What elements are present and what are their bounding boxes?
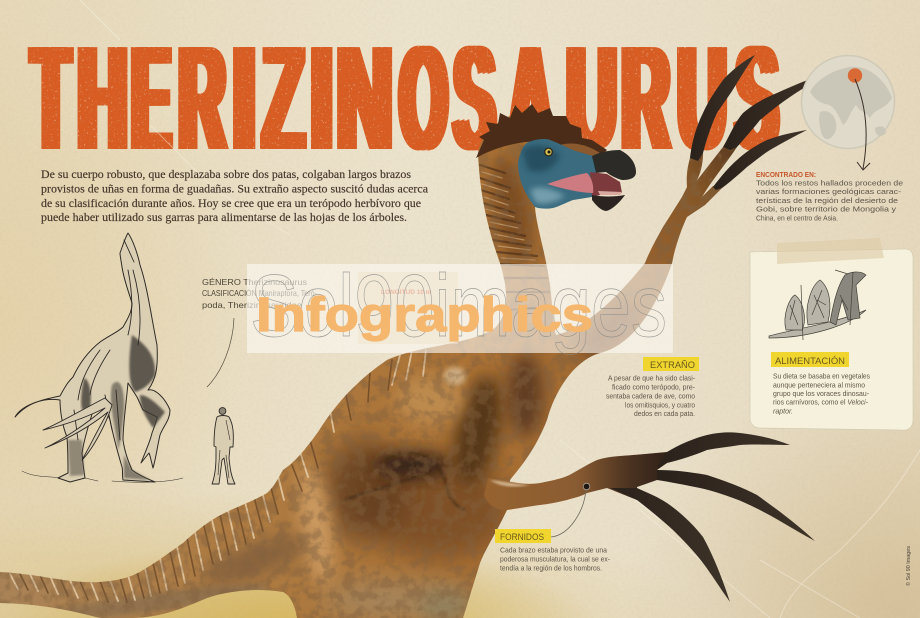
intro text	[41, 167, 429, 224]
claw three	[610, 488, 730, 602]
open mouth	[590, 172, 622, 197]
label and text: extraño: los ornitisquios, y cuatro	[625, 400, 695, 410]
blue face	[518, 139, 597, 209]
continents	[810, 67, 892, 139]
claw two	[657, 470, 815, 541]
title: E	[132, 16, 170, 181]
claw three	[713, 130, 807, 190]
title: T	[32, 16, 69, 181]
length note: longitud	[358, 272, 458, 344]
dinosaur head	[476, 104, 636, 211]
sketch: human scale figure	[212, 408, 235, 484]
title: R	[179, 16, 225, 181]
title: O	[400, 16, 446, 181]
callout: fornidos: tendía a la región de los hombros.	[500, 564, 602, 572]
callout: fornidos	[495, 483, 610, 572]
sketch: trees and dinosaur feeding	[769, 270, 866, 340]
intro text: puede haber utilizado sus garras para alimentarse de las hojas de los árboles.	[41, 210, 407, 224]
intro text: provistos de uñas en forma de guadañas. Su extraño aspecto suscitó dudas acerca	[41, 182, 429, 196]
title	[28, 16, 780, 181]
title: S	[736, 16, 777, 181]
title: Z	[262, 16, 303, 181]
hidden text behind banner: género and clasificación: CLASIFICACIÓN Maniraptora, Teró-	[202, 288, 317, 298]
claw one	[690, 55, 755, 161]
callout: fornidos: FORNIDOS	[500, 532, 544, 543]
beak	[592, 150, 636, 180]
tape	[777, 238, 884, 264]
tail and back stripes	[10, 350, 426, 601]
intro text: de su clasificación durante años. Hoy se cree que era un terópodo herbívoro que	[41, 196, 421, 210]
title: U	[678, 16, 726, 181]
title: U	[567, 16, 616, 181]
label and text: extraño: A pesar de que ha sido clasi-	[608, 374, 695, 382]
sketch ground	[22, 471, 183, 482]
text: encontrado en: ENCONTRADO EN:	[756, 172, 816, 179]
body shading	[30, 153, 651, 618]
hand mottling	[646, 147, 736, 263]
globe locator	[802, 56, 894, 148]
hidden text behind banner: género and clasificación	[202, 277, 317, 310]
callout line from classification	[207, 318, 234, 387]
upper hand with claws	[645, 55, 807, 263]
intro text: De su cuerpo robusto, que desplazaba sobre dos patas, colgaban largos brazos	[41, 167, 411, 181]
label and text: extraño: EXTRAÑO	[650, 360, 695, 371]
text: encontrado en: Todos los restos hallados proceden de	[756, 178, 903, 188]
forearm	[484, 452, 667, 510]
text: alimentación	[773, 372, 870, 416]
claw two	[723, 75, 825, 150]
title: I	[223, 16, 265, 181]
text: alimentación: rios carnívoros, como el Veloci-	[773, 398, 868, 406]
dinosaur body	[0, 112, 672, 618]
label: alimentación: ALIMENTACIÓN	[775, 356, 845, 367]
arrow from globe to text	[855, 79, 870, 170]
sketch shading	[68, 335, 165, 480]
tongue	[547, 173, 593, 193]
text: alimentación: aunque perteneciera al mismo	[773, 380, 865, 390]
fingers and palm	[645, 147, 737, 263]
sketch claws	[43, 398, 112, 460]
sketch body	[15, 233, 170, 482]
thigh outline	[345, 453, 465, 510]
note card: alimentación	[750, 238, 913, 430]
title: I	[301, 16, 342, 181]
label and text: extraño: dedos en cada pata.	[634, 409, 695, 418]
length note: longitud: LONGITUD 10 m	[381, 289, 432, 296]
label and text: extraño: sentaba cadera de ave, como	[606, 392, 695, 400]
text: encontrado en: terísticas de la región del desierto de	[756, 196, 898, 205]
watermark: orange text: Infographics	[256, 289, 593, 342]
neck stripes	[480, 165, 550, 310]
title: A	[508, 16, 553, 181]
text: encontrado en: China, en el centro de Asia.	[756, 214, 838, 222]
text: alimentación: raptor.	[773, 406, 793, 416]
text: encontrado en: varias formaciones geológicas carac-	[756, 187, 902, 196]
sketch: dinosaur scale figure	[15, 233, 183, 482]
title wear	[26, 46, 782, 152]
hidden text behind banner: género and clasificación: GÉNERO Therizinosaurus	[202, 277, 307, 287]
copyright: © Sol 90 Images	[905, 545, 912, 586]
text: encontrado en	[756, 172, 903, 222]
title: R	[622, 16, 669, 181]
lower jaw	[592, 195, 625, 211]
crest feathers	[476, 104, 607, 158]
label: alimentación	[771, 352, 849, 367]
text: encontrado en: Gobi, sobre territorio de Mongolia y	[756, 204, 896, 214]
hidden text behind banner: género and clasificación: poda, Therizinosauridae	[202, 300, 302, 310]
text: alimentación: Su dieta se basaba en vegetales	[773, 372, 870, 380]
lower hand with claws	[484, 432, 815, 602]
watermark: outline text: Sol90images	[250, 256, 667, 355]
label and text: extraño	[606, 357, 699, 418]
callout: fornidos: Cada brazo estaba provisto de una	[500, 546, 608, 554]
eye	[544, 148, 553, 156]
location dot	[848, 68, 862, 83]
claw one	[657, 432, 790, 468]
text: alimentación: grupo que los voraces dinosau-	[773, 389, 869, 398]
title: N	[337, 16, 392, 181]
skin mottling	[0, 112, 672, 618]
watermark banner	[247, 256, 673, 355]
label and text: extraño: ficado como terópodo, pre-	[612, 382, 696, 392]
title: S	[454, 16, 494, 181]
callout: fornidos: poderosa musculatura, la cual se ex-	[500, 554, 610, 564]
title: H	[78, 16, 127, 181]
